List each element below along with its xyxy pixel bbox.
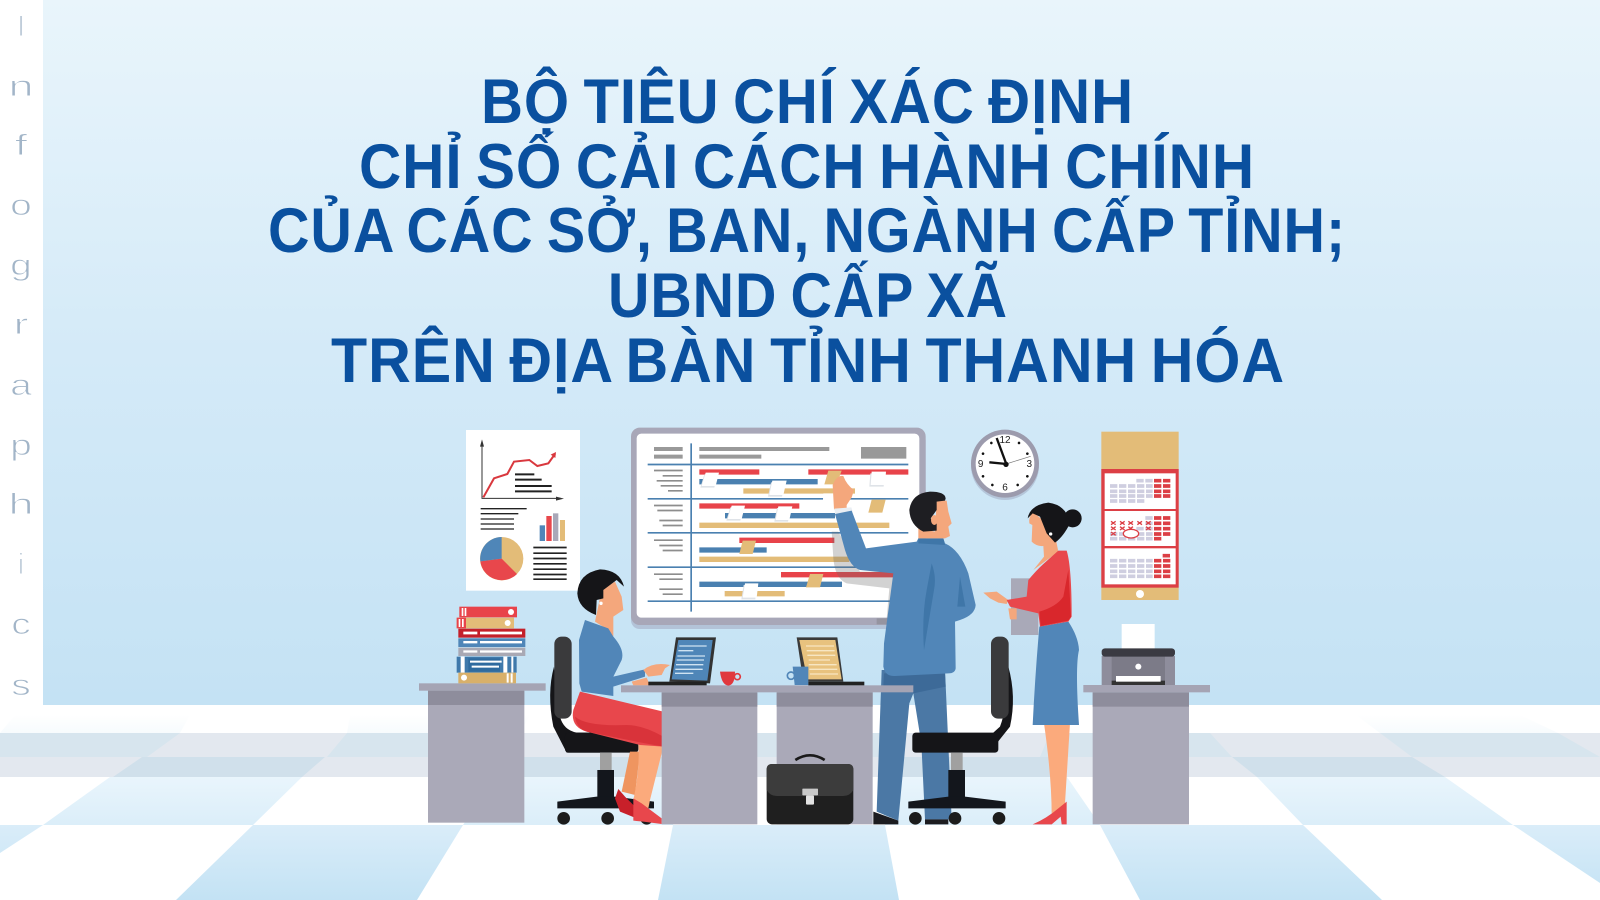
left strip: vertical word Infographics: a	[10, 369, 33, 402]
wall background	[0, 0, 1600, 705]
wall clock: 3	[1027, 459, 1033, 470]
poster with charts	[466, 430, 580, 591]
wall calendar	[1101, 432, 1179, 600]
standing woman holding folder	[983, 503, 1082, 824]
wall clock: 6	[1002, 482, 1008, 493]
left strip: vertical word Infographics: i	[19, 549, 23, 581]
left strip: vertical word Infographics: c	[11, 608, 31, 641]
center desks	[621, 685, 913, 824]
floor: checkered tiles	[0, 705, 1600, 900]
left strip: vertical word Infographics: n	[8, 69, 34, 103]
whiteboard with gantt chart	[631, 428, 926, 629]
left strip: vertical word Infographics: p	[10, 429, 32, 462]
seated woman on office chair	[550, 569, 670, 825]
left desk	[419, 683, 546, 823]
laptop and blue mug	[787, 637, 864, 685]
left strip: vertical word Infographics: s	[11, 669, 31, 702]
wall clock: 9	[978, 459, 984, 470]
title: TRÊN ĐỊA BÀN TỈNH THANH HÓA	[331, 325, 1285, 396]
left strip: vertical word Infographics: r	[14, 307, 29, 341]
briefcase	[767, 755, 853, 824]
left strip: vertical word Infographics: o	[10, 189, 32, 222]
laptop and red cup	[648, 637, 740, 686]
left strip: vertical word Infographics: I	[18, 11, 24, 43]
man standing at the board	[833, 476, 976, 824]
left strip: vertical word Infographics: h	[8, 487, 34, 521]
title: BỘ TIÊU CHÍ XÁC ĐỊNH	[481, 66, 1134, 137]
left strip: vertical word Infographics: g	[10, 249, 32, 282]
left strip: vertical word Infographics	[0, 0, 43, 705]
stack of books	[457, 607, 525, 683]
wall clock: 12	[999, 435, 1011, 446]
title: CHỈ SỐ CẢI CÁCH HÀNH CHÍNH	[359, 131, 1255, 202]
left strip: vertical word Infographics: f	[15, 128, 28, 162]
title	[268, 66, 1346, 396]
title: CỦA CÁC SỞ, BAN, NGÀNH CẤP TỈNH;	[268, 195, 1346, 266]
printer	[1102, 624, 1175, 685]
empty office chair	[908, 637, 1013, 825]
wall clock	[971, 430, 1039, 500]
title: UBND CẤP XÃ	[608, 260, 1008, 331]
right desk	[1083, 685, 1210, 824]
